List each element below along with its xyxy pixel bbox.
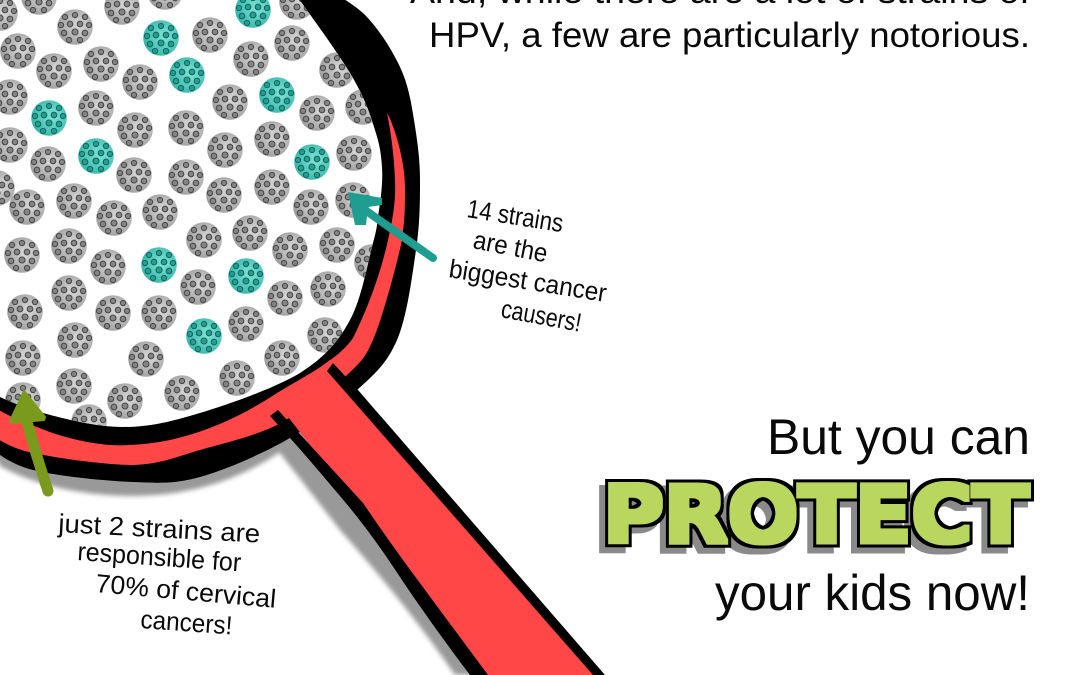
annotation: just 2 strains: cancers! [140,604,233,640]
magnifying glass [0,0,605,675]
intro text: HPV, a few are particularly notorious. [429,16,1030,55]
annotation: 14 strains: biggest cancer [447,253,609,308]
handle [270,360,605,675]
PROTECT: PROTECT [603,471,1029,561]
call to action [603,409,1030,621]
handle left edge [270,410,488,675]
handle red fill [275,360,593,675]
annotation: 14 strains: are the [471,224,550,268]
annotation: 14 strains: 14 strains [465,193,566,238]
But you can: But you can [767,409,1030,465]
annotation: 14 strains: causers! [499,293,584,338]
annotation: just 2 strains [57,508,277,640]
lens red band [0,113,405,465]
teal virus particles [31,0,330,354]
your kids now!: your kids now! [715,565,1030,621]
annotation: 14 strains [447,193,609,338]
handle right edge [327,363,605,675]
lens interior [0,0,382,427]
intro text [410,0,1030,55]
grey virus particles [0,0,390,440]
arrow: teal [348,192,433,258]
magnifying glass shadow [0,425,495,675]
annotation: just 2 strains: responsible for [77,536,243,577]
annotation: just 2 strains: 70% of cervical [94,568,277,614]
lens outer black ring [0,0,420,483]
annotation: just 2 strains: just 2 strains are [57,508,261,549]
arrow: green [10,391,48,491]
